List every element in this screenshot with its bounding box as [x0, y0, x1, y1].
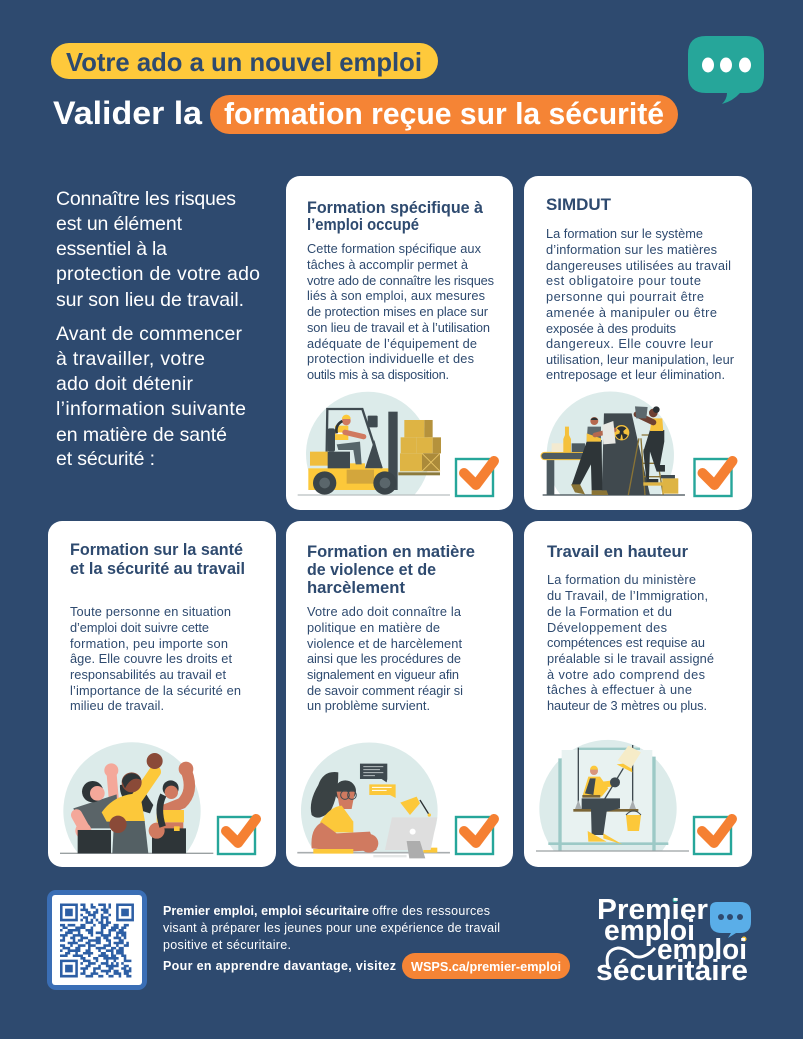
footer text: visant à préparer les jeunes pour une expérience de travail	[163, 921, 500, 935]
body text: La formation sur le système	[546, 226, 703, 241]
body text: milieu de travail.	[70, 698, 164, 713]
body text: formation, peu importe son	[70, 636, 228, 651]
body text: utilisation, leur manipulation, leur	[546, 352, 735, 367]
website link pill	[402, 953, 570, 979]
heading: Formation spécifique à	[307, 199, 484, 217]
website link pill: WSPS.ca/premier-emploi	[411, 959, 561, 974]
heading: SIMDUT	[546, 196, 611, 214]
body text: amenée à manipuler ou être	[546, 305, 717, 320]
body text: La formation du ministère	[547, 572, 696, 587]
title: top pill: Votre ado a un nouvel emploi	[66, 47, 422, 77]
panel: violence et harcèlement	[286, 521, 513, 867]
body text: d’information sur les matières	[546, 242, 717, 257]
logo: Premier emploi, emploi sécuritaire: Premier	[597, 894, 708, 926]
intro text: protection de votre ado	[56, 263, 260, 285]
illustration: window washer	[536, 740, 689, 851]
body text: dangereux. Elle couvre leur	[546, 336, 714, 351]
panel: travail en hauteur	[524, 521, 752, 867]
body text: d’emploi doit suivre cette	[70, 620, 209, 635]
body text: responsabilités au travail et	[70, 667, 226, 682]
body text: adéquate de l’équipement de	[307, 336, 477, 351]
logo: Premier emploi, emploi sécuritaire: sécuritaire	[596, 955, 748, 987]
body text: de protection mises en place sur	[307, 304, 489, 319]
body text: hauteur de 3 mètres ou plus.	[547, 698, 707, 713]
title: main heading: Valider la	[53, 95, 202, 131]
QR code	[47, 890, 147, 990]
body text: à votre ado comprend des	[547, 667, 705, 682]
icon: speech bubble	[688, 36, 764, 104]
body text: Votre ado doit connaître la	[307, 604, 462, 619]
logo: Premier emploi, emploi sécuritaire: emploi	[604, 915, 695, 947]
body text	[70, 604, 241, 713]
heading: et la sécurité au travail	[70, 560, 245, 578]
body text: outils mis à sa disposition.	[307, 367, 449, 382]
heading: l’emploi occupé	[307, 216, 419, 234]
panel: santé et sécurité au travail	[48, 521, 276, 867]
body text: protection individuelle et des	[307, 351, 474, 366]
intro text	[56, 188, 260, 470]
body text: exposée à des produits	[546, 321, 676, 336]
body text: préalable si le travail assigné	[547, 651, 714, 666]
title: main heading: formation reçue sur la sécurité	[224, 96, 664, 131]
illustration: woman at computer	[297, 742, 450, 858]
intro text: sur son lieu de travail.	[56, 289, 244, 311]
panel: formation spécifique à l'emploi	[286, 176, 513, 510]
body text: de la Formation et du	[547, 604, 672, 619]
panel: SIMDUT	[524, 176, 752, 510]
body text: violence et de harcèlement	[307, 636, 462, 651]
intro text: est un élément	[56, 213, 183, 235]
title: main heading	[53, 95, 678, 134]
footer text: positive et sécuritaire.	[163, 938, 291, 952]
body text: l’importance de la sécurité en	[70, 683, 241, 698]
heading: Formation en matière	[307, 543, 475, 561]
heading: Travail en hauteur	[547, 543, 689, 561]
intro text: en matière de santé	[56, 424, 227, 446]
body text: Cette formation spécifique aux	[307, 241, 482, 256]
body text: est obligatoire pour toute	[546, 273, 701, 288]
icon: checkbox	[218, 817, 256, 854]
heading	[307, 543, 475, 597]
body text: tâches à effectuer à une	[547, 682, 692, 697]
body text: son lieu de travail et à l’utilisation	[307, 320, 490, 335]
heading	[307, 199, 484, 234]
body text	[307, 604, 463, 713]
logo: Premier emploi, emploi sécuritaire: emploi	[657, 934, 747, 966]
footer text: Premier emploi, emploi sécuritaire	[163, 904, 369, 918]
body text	[307, 241, 494, 382]
intro text: et sécurité :	[56, 448, 155, 470]
heading: Formation sur la santé	[70, 541, 243, 559]
icon: checkbox	[694, 459, 732, 496]
footer text: offre des ressources	[372, 904, 490, 918]
logo: Premier emploi, emploi sécuritaire	[596, 894, 751, 987]
icon: checkbox	[456, 459, 494, 496]
heading: harcèlement	[307, 579, 406, 597]
body text: personne qui pourrait être	[546, 289, 704, 304]
illustration: raised fists	[60, 742, 213, 853]
intro text: à travailler, votre	[56, 348, 205, 370]
body text	[546, 226, 735, 382]
body text: compétences est requise au	[547, 635, 705, 650]
body text: ainsi que les procédures de	[307, 651, 461, 666]
body text: Toute personne en situation	[70, 604, 231, 619]
illustration: forklift	[298, 392, 450, 495]
body text: du Travail, de l’Immigration,	[547, 588, 708, 603]
body text: âge. Elle couvre les droits et	[70, 651, 232, 666]
heading	[70, 541, 245, 578]
body text: tâches à accomplir permet à	[307, 257, 469, 272]
footer text: Pour en apprendre davantage, visitez	[163, 959, 396, 973]
intro text: l’information suivante	[56, 398, 246, 420]
body text: entreposage et leur élimination.	[546, 367, 725, 382]
body text: dangereuses utilisées au travail	[546, 258, 731, 273]
intro text: Avant de commencer	[56, 323, 242, 345]
body text: liés à son emploi, aux mesures	[307, 288, 485, 303]
icon: checkbox	[694, 817, 732, 854]
intro text: essentiel à la	[56, 238, 167, 260]
body text: de savoir comment réagir si	[307, 683, 463, 698]
icon: checkbox	[456, 817, 494, 854]
body text	[547, 572, 714, 713]
heading: de violence et de	[307, 561, 436, 579]
body text: signalement en vigueur afin	[307, 667, 459, 682]
intro text: Connaître les risques	[56, 188, 236, 210]
body text: un problème survient.	[307, 698, 430, 713]
body text: politique en matière de	[307, 620, 440, 635]
body text: Développement des	[547, 620, 667, 635]
footer text	[163, 904, 500, 973]
body text: votre ado de connaître les risques	[307, 273, 494, 288]
intro text: ado doit détenir	[56, 373, 194, 395]
illustration: hazardous materials	[541, 391, 685, 495]
